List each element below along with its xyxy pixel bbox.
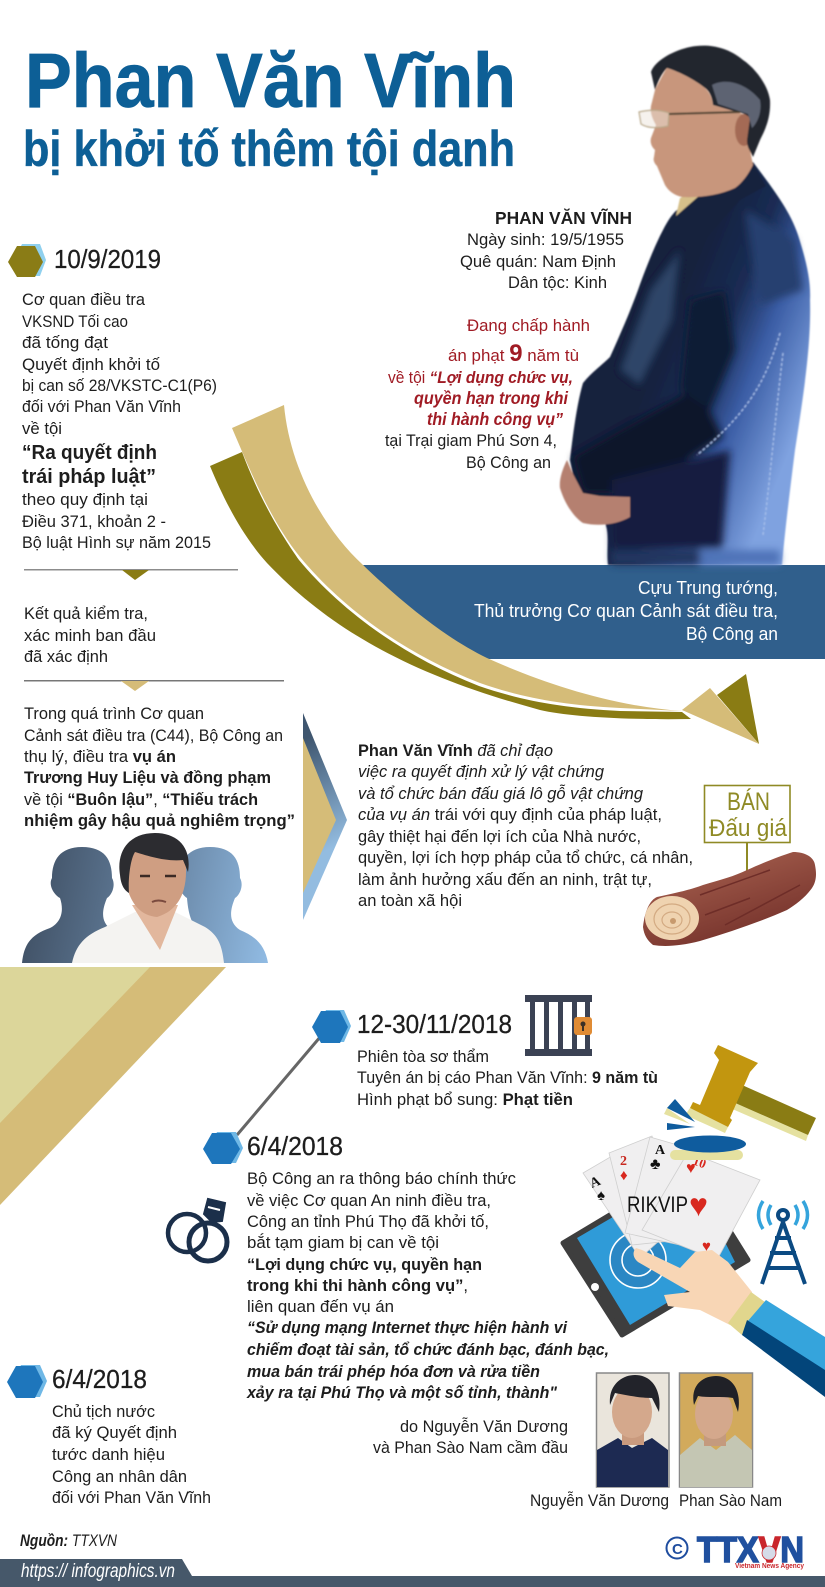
text block: first instance trial: [357, 1047, 658, 1109]
text block: wrongdoing: của vụ án trái với quy định của pháp luật,: [358, 805, 662, 824]
text block: president decision: đối với Phan Văn Vĩnh: [52, 1488, 211, 1507]
playing cards: [583, 1136, 760, 1260]
title: [23, 38, 516, 177]
text block: charge: bị can số 28/VKSTC-C1(P6): [22, 376, 217, 395]
title: bị khởi tố thêm tội danh: [23, 121, 515, 177]
hands: [560, 460, 630, 525]
text block: initial findings: xác minh ban đầu: [24, 626, 156, 645]
text block: wrongdoing: gây thiệt hại đến lợi ích của Nhà nước,: [358, 827, 641, 846]
sentence text: Bộ Công an: [466, 453, 551, 472]
group portrait with silhouettes: [22, 833, 268, 963]
hexagon marker: [203, 1132, 243, 1164]
text block: charge: trái pháp luật”: [22, 466, 156, 488]
hexagon marker: [7, 1365, 47, 1398]
playing cards: A: [588, 1174, 604, 1192]
sentence text: tại Trại giam Phú Sơn 4,: [385, 431, 557, 450]
hand: [634, 1248, 752, 1325]
text block: charge: về tội: [22, 419, 62, 438]
playing cards: ♥: [686, 1160, 696, 1177]
text block: first instance trial: Hình phạt bổ sung: Phạt tiền: [357, 1090, 573, 1109]
text block: first instance trial: Tuyên án bị cáo Phan Văn Vĩnh: 9 năm tù: [357, 1068, 658, 1087]
sentence text: về tội “Lợi dụng chức vụ,: [388, 368, 573, 387]
text block: wrongdoing: an toàn xã hội: [358, 891, 462, 910]
date: 12-30/11/2018: 12-30/11/2018: [357, 1009, 512, 1039]
text block: charge: Quyết định khởi tố: [22, 355, 161, 374]
collar: [677, 163, 766, 245]
photo captions: Nguyễn Văn Dương: [530, 1491, 669, 1510]
date: 6/4/2018 (Ministry): 6/4/2018: [247, 1131, 343, 1161]
sentence text: quyền hạn trong khi: [414, 388, 569, 408]
hair: [651, 46, 770, 157]
playing cards: 10: [691, 1153, 708, 1171]
face: [651, 68, 753, 197]
playing cards: ♣: [650, 1156, 661, 1173]
text block: wrongdoing: việc ra quyết định xử lý vật chứng: [358, 762, 605, 781]
sentence text: [385, 316, 590, 472]
logo: TTXVN: TTXVN: [697, 1529, 804, 1570]
text block: charge: đã tống đạt: [22, 333, 108, 352]
text block: ministry announcement: bắt tạm giam bị can về tội: [247, 1233, 439, 1252]
text block: investigation: thụ lý, điều tra vụ án: [24, 747, 176, 766]
icon: handcuffs: [168, 1199, 227, 1261]
text block: ministry announcement: và Phan Sào Nam cầm đầu: [373, 1438, 568, 1457]
playing cards: ♠: [597, 1187, 605, 1204]
text block: president decision: tước danh hiệu: [52, 1445, 165, 1464]
profile text: [460, 207, 632, 292]
photo: Phan Sao Nam: [680, 1373, 752, 1487]
blue band: former position: Thủ trưởng Cơ quan Cảnh sát điều tra,: [474, 600, 778, 621]
text block: ministry announcement: chiếm đoạt tài sản, tổ chức đánh bạc, đánh bạc,: [247, 1340, 609, 1359]
icon: auction sign and wood log: [643, 786, 816, 946]
text block: initial findings: Kết quả kiểm tra,: [24, 604, 148, 623]
text block: charge: VKSND Tối cao: [22, 312, 128, 331]
text block: ministry announcement: “Lợi dụng chức vụ, quyền hạn: [247, 1255, 482, 1274]
text block: investigation: Trương Huy Liệu và đồng phạm: [24, 768, 271, 787]
text block: charge: đối với Phan Văn Vĩnh: [22, 397, 181, 416]
blue band: former position: Cựu Trung tướng,: [638, 577, 778, 598]
text block: investigation: Trong quá trình Cơ quan: [24, 704, 204, 723]
stitching: [697, 333, 783, 535]
date: 10/9/2019: [8, 244, 161, 277]
decorative corner triangles: [0, 967, 226, 1205]
sentence text: thi hành công vụ”: [427, 409, 563, 429]
text block: president decision: [52, 1402, 211, 1507]
date: 6/4/2018 (President): 6/4/2018: [52, 1364, 147, 1394]
text block: charge: Cơ quan điều tra: [22, 290, 146, 309]
swoosh arrow: [210, 405, 759, 744]
profile text: PHAN VĂN VĨNH: [495, 207, 632, 228]
date: 6/4/2018 (Ministry): [203, 1131, 343, 1164]
blue band: former position: [363, 565, 825, 659]
chevron arrow: [303, 713, 347, 920]
text block: ministry announcement: do Nguyễn Văn Dương: [400, 1417, 568, 1436]
text block: ministry announcement: mua bán trái phép hóa đơn và rửa tiền: [247, 1362, 540, 1381]
playing cards: 2: [620, 1154, 627, 1169]
photo: Phan Van Vinh: [560, 46, 810, 565]
sleeve: [728, 1292, 825, 1397]
text block: first instance trial: Phiên tòa sơ thẩm: [357, 1047, 489, 1066]
text block: ministry announcement: Công an tỉnh Phú Thọ đã khởi tố,: [247, 1212, 489, 1231]
text block: ministry announcement: “Sử dụng mạng Internet thực hiện hành vi: [247, 1318, 568, 1337]
illustration: gavel, cards, tablet and hand: [563, 1045, 825, 1397]
text block: ministry announcement: trong khi thi hành công vụ”,: [247, 1276, 468, 1295]
title: Phan Văn Vĩnh: [25, 38, 516, 124]
text block: initial findings: đã xác định: [24, 647, 108, 666]
text block: charge: Điều 371, khoản 2 -: [22, 512, 166, 531]
blue band: former position: Bộ Công an: [686, 623, 778, 644]
profile text: Dân tộc: Kinh: [508, 273, 607, 292]
text block: charge: [22, 290, 217, 552]
text block: wrongdoing: Phan Văn Vĩnh đã chỉ đạo: [358, 741, 553, 760]
photo captions: Phan Sào Nam: [679, 1491, 782, 1510]
text block: president decision: Chủ tịch nước: [52, 1402, 155, 1421]
text block: wrongdoing: quyền, lợi ích hợp pháp của tổ chức, cá nhân,: [358, 848, 693, 867]
profile text: Quê quán: Nam Định: [460, 252, 616, 271]
playing cards: ♥: [689, 1187, 708, 1223]
icon: auction sign and wood log: BÁN: [727, 787, 770, 816]
jacket: [570, 162, 810, 565]
glasses: [639, 110, 669, 128]
tablet: [563, 1167, 748, 1335]
playing cards: A: [655, 1143, 666, 1158]
profile text: Ngày sinh: 19/5/1955: [467, 230, 624, 249]
icon: signal tower: [758, 1201, 808, 1284]
timeline connector: [237, 1036, 321, 1135]
hexagon marker: [8, 244, 46, 277]
text block: wrongdoing: làm ảnh hưởng xấu đến an ninh, trật tự,: [358, 870, 652, 889]
text block: initial findings: [24, 604, 156, 666]
date: 12-30/11/2018: [312, 1009, 512, 1043]
text block: president decision: Công an nhân dân: [52, 1467, 187, 1486]
icon: auction sign and wood log: Đấu giá: [709, 815, 788, 842]
text block: ministry announcement: [246, 1169, 609, 1457]
gavel: [664, 1045, 816, 1160]
footer bar with URL: [0, 1559, 825, 1587]
sentence text: Đang chấp hành: [467, 316, 590, 335]
text block: investigation: [24, 704, 295, 830]
divider with olive marker: [24, 569, 238, 580]
text block: investigation: về tội “Buôn lậu”, “Thiếu trách: [24, 790, 258, 809]
text block: investigation: nhiệm gây hậu quả nghiêm trọng”: [24, 811, 295, 830]
sentence text: án phạt 9 năm tù: [448, 340, 579, 367]
date: 6/4/2018 (President): [7, 1364, 147, 1398]
footer bar with URL: https:// infographics.vn: [21, 1561, 175, 1582]
text block: ministry announcement: Bộ Công an ra thông báo chính thức: [247, 1169, 516, 1188]
playing cards: ♦: [620, 1167, 628, 1184]
hexagon marker: [312, 1010, 351, 1043]
icon: jail bars with lock: [525, 995, 592, 1056]
text block: charge: Bộ luật Hình sự năm 2015: [22, 533, 211, 552]
logo: TTXVN: Vietnam News Agency: [735, 1561, 805, 1570]
text block: wrongdoing: [358, 741, 693, 910]
text block: ministry announcement: liên quan đến vụ án: [247, 1297, 394, 1316]
text block: president decision: đã ký Quyết định: [52, 1423, 177, 1442]
text block: ministry announcement: xảy ra tại Phú Thọ và một số tỉnh, thành": [246, 1383, 558, 1402]
text block: wrongdoing: và tổ chức bán đấu giá lô gỗ vật chứng: [358, 784, 644, 803]
source: Nguồn: TTXVN: [20, 1531, 118, 1550]
text block: ministry announcement: về việc Cơ quan An ninh điều tra,: [247, 1191, 491, 1210]
divider with tan marker: [24, 680, 284, 691]
text block: charge: “Ra quyết định: [22, 442, 157, 464]
ear: [735, 114, 753, 146]
playing cards: RIKVIP: [627, 1192, 688, 1217]
photo captions: [530, 1491, 782, 1510]
photo: Nguyen Van Duong: [596, 1373, 669, 1487]
shirt collar: [676, 182, 715, 216]
text block: investigation: Cảnh sát điều tra (C44), Bộ Công an: [24, 726, 283, 745]
playing cards: ♥: [702, 1238, 711, 1255]
text block: charge: theo quy định tại: [22, 490, 148, 509]
logo: TTXVN: C: [672, 1541, 683, 1558]
date: 10/9/2019: 10/9/2019: [54, 244, 161, 274]
